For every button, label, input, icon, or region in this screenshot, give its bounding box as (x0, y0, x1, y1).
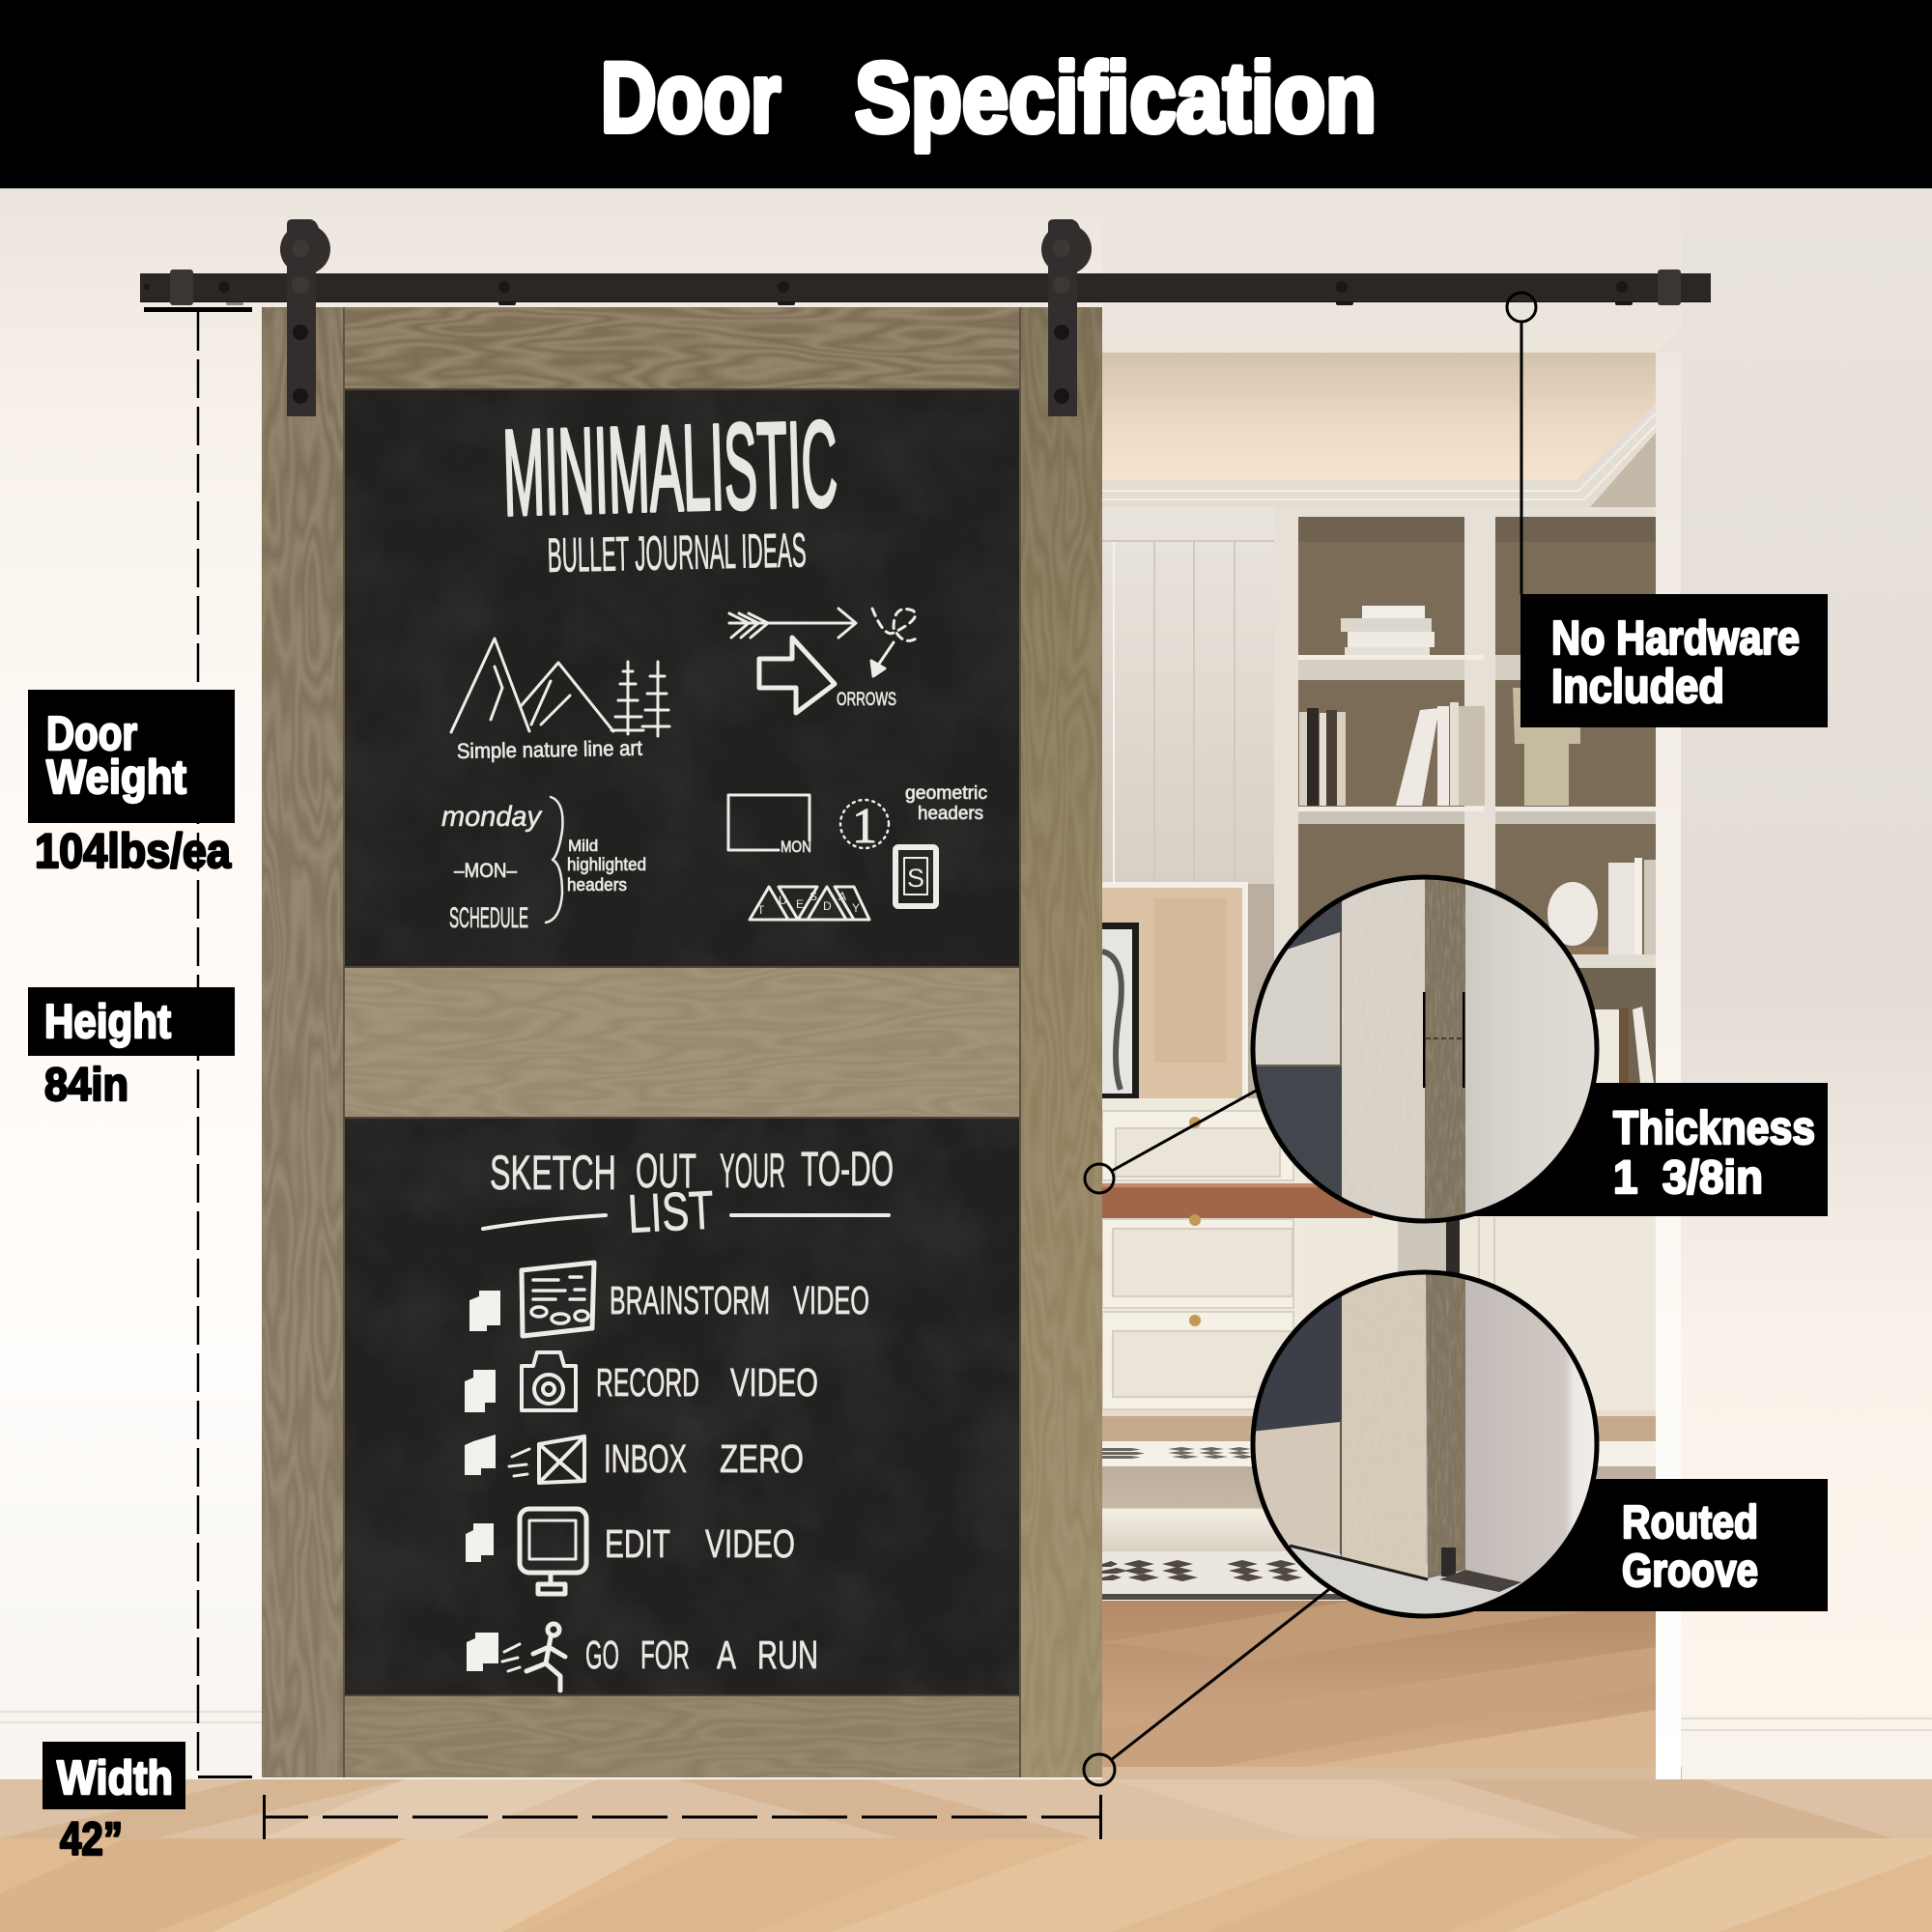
rug diamonds: lower stripe (1102, 1560, 1302, 1581)
chalk list heading: SKETCH (490, 1146, 616, 1200)
label: width: 42” (60, 1814, 123, 1865)
chalk item: record video: RECORD (596, 1360, 699, 1405)
chalk item: go for a run: A (717, 1633, 736, 1677)
chalk icon: brainstorm board (522, 1263, 594, 1336)
chalk art: upper panel: BULLET JOURNAL IDEAS (547, 523, 807, 582)
callout: routed groove: Groove (1622, 1546, 1758, 1597)
callout: no hardware included (1507, 293, 1828, 727)
label: door weight: Weight (46, 752, 186, 804)
label: width: Width (57, 1752, 173, 1804)
height dimension line (144, 307, 252, 1778)
chalk numbered circle: 1 (852, 799, 877, 854)
door left stile (262, 307, 344, 1777)
room floor (1102, 1410, 1656, 1767)
callout: thickness: 1 3/8in (1613, 1152, 1763, 1204)
lower chalkboard panel (344, 1118, 1020, 1695)
callout: no hardware included: No Hardware (1551, 612, 1800, 665)
label: door weight: Door (46, 708, 137, 760)
chalk icon: camera (522, 1352, 576, 1410)
chalk tuesday bunting: A (838, 890, 846, 903)
track end stops (170, 270, 1681, 305)
chalk note: highlighted (567, 855, 646, 874)
chalk box header (728, 795, 810, 850)
chalk item: inbox zero: INBOX (604, 1436, 687, 1481)
cabinet base and desk (1102, 1098, 1656, 1410)
chalk item: brainstorm video: VIDEO (793, 1278, 869, 1322)
door middle rail (344, 967, 1020, 1118)
chalk tuesday bunting: S (810, 890, 817, 903)
chalk schedule headers: monday (441, 801, 543, 833)
chalk caption: nature: Simple nature line art (457, 736, 642, 763)
chalk art: upper panel: SCHEDULE (449, 902, 528, 934)
side wall beyond crown (1584, 425, 1656, 522)
chalk checkboxes (465, 1291, 500, 1671)
label: height: Height (44, 996, 171, 1048)
baseboards (0, 1708, 1932, 1779)
label: height: 84in (44, 1060, 128, 1111)
chalk icon: envelope (509, 1436, 584, 1483)
chalk tuesday bunting (750, 887, 869, 920)
chalk list heading: TO-DO (801, 1142, 894, 1196)
label: door weight (28, 690, 235, 878)
chalk item: brainstorm video: BRAINSTORM (610, 1278, 770, 1322)
room seen through the opening (1102, 331, 1681, 1779)
chalk art: lower panel (465, 1142, 894, 1690)
chalk item: go for a run: FOR (640, 1633, 690, 1677)
chalk item: inbox zero: ZERO (720, 1436, 804, 1481)
chalk S tile (895, 847, 936, 906)
wall art (1102, 882, 1248, 1098)
chalk item: edit video: EDIT (605, 1521, 670, 1566)
chalk list subheading: LIST (626, 1179, 716, 1244)
chalk item: edit video: VIDEO (705, 1521, 795, 1566)
door bottom rail (344, 1695, 1020, 1777)
chalk art: upper panel: MON (781, 838, 811, 856)
door top rail (344, 307, 1020, 389)
ceiling (1102, 353, 1656, 483)
chalk item: record video: VIDEO (730, 1360, 818, 1405)
crown moulding (1102, 403, 1656, 507)
chalk S tile: S (907, 864, 924, 893)
detail circle: routed groove (1251, 1271, 1599, 1619)
chalk item: go for a run: RUN (757, 1633, 818, 1677)
chalk item: go for a run: GO (585, 1633, 619, 1677)
chalk list heading: OUT (636, 1144, 696, 1198)
chalk item: inbox zero (604, 1436, 804, 1481)
chalk caption: arrows: ORROWS (837, 690, 896, 710)
main floor (0, 1767, 1932, 1932)
chalk caption: geometric (905, 783, 987, 824)
callout: thickness: Thickness (1613, 1103, 1815, 1154)
callout: routed groove (1084, 1271, 1828, 1785)
chalk caption: geometric: headers (918, 804, 983, 824)
chalk mountains (451, 639, 669, 736)
rug diamonds: top stripe (1102, 1447, 1255, 1459)
barn door (262, 307, 1102, 1777)
chalk note: headers (567, 875, 627, 895)
bookcase (1274, 507, 1656, 1111)
callout: no hardware included: Included (1551, 661, 1724, 713)
header bar (0, 0, 1932, 188)
chalk note (567, 837, 646, 895)
label: door weight: 104lbs/ea (35, 824, 232, 878)
chalk arrows (729, 609, 918, 713)
width dimension line (263, 1795, 1102, 1839)
chalk tuesday bunting: D (823, 899, 832, 913)
chalk icon: monitor (520, 1509, 586, 1594)
rug (1102, 1441, 1656, 1600)
chalk tuesday bunting: Y (852, 901, 860, 915)
label: width (43, 1742, 185, 1865)
right hanger strap (1041, 219, 1092, 416)
chalk tuesday bunting: T (757, 903, 765, 917)
callout: routed groove: Routed (1622, 1497, 1758, 1548)
track bolts (144, 281, 1633, 305)
shelf objects: books and ornaments (1299, 606, 1656, 1083)
door right stile (1020, 307, 1102, 1777)
wall panelling (1102, 507, 1276, 1098)
soffit of the opening (1102, 331, 1679, 353)
label: height (28, 987, 235, 1111)
chalk art: upper panel (441, 395, 987, 934)
callout: thickness (1085, 875, 1828, 1223)
chalk list heading (490, 1142, 894, 1200)
title: Specification (855, 43, 1377, 153)
chalk caption: geometric: geometric (905, 783, 987, 804)
chalk numbered circle (840, 799, 889, 854)
chalk item: edit video (605, 1521, 795, 1566)
left hanger strap (280, 219, 330, 416)
chalk art: upper panel: MINIMALISTIC (501, 395, 839, 541)
sliding track hardware (140, 219, 1711, 416)
chalk item: go for a run (585, 1633, 818, 1677)
chalk list heading: YOUR (720, 1144, 785, 1198)
chalk art: upper panel: –MON– (454, 860, 517, 882)
upper chalkboard panel (344, 389, 1020, 967)
chalk icon: runner (502, 1624, 565, 1690)
chalk tuesday bunting: E (796, 897, 804, 911)
chalk note: Mild (568, 837, 598, 855)
track rail (140, 273, 1711, 302)
title: Door (601, 43, 781, 153)
title (601, 43, 1377, 153)
chalk tuesday bunting: U (779, 894, 787, 907)
chalk brace (546, 797, 562, 923)
detail circle: thickness (1251, 875, 1601, 1223)
opening jamb (1656, 353, 1681, 1779)
